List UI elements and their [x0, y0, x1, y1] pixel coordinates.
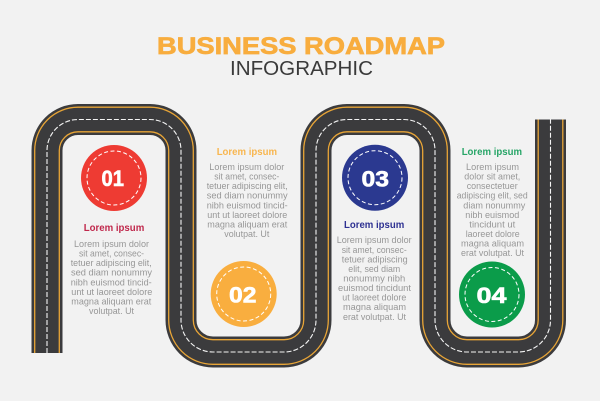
badge 04: [459, 262, 525, 328]
text block 01: nibh euismod tincid-: [71, 277, 152, 288]
text block 03: sit amet, consec-: [342, 245, 407, 256]
text block 04: magna aliquam: [461, 239, 524, 250]
text block 04: nibh euismod: [465, 210, 519, 221]
text block 03: Lorem ipsum dolor: [337, 235, 412, 246]
badge 01: [81, 145, 147, 211]
text block 02: volutpat. Ut: [224, 229, 270, 240]
text block 03: nonummy nibh: [343, 274, 405, 284]
text block 01: tetuer adipiscing elit,: [71, 258, 152, 269]
text block 03: magna aliquam: [343, 302, 406, 313]
badge 01: 01: [102, 166, 124, 191]
text block 04: [457, 162, 528, 259]
title: BUSINESS ROADMAP: [157, 33, 445, 60]
text block 02: unt ut laoreet dolore: [207, 210, 287, 221]
text block 04: adipiscing elit, sed: [457, 191, 528, 202]
text block 01: volutpat. Ut: [89, 306, 134, 317]
text block 03: [337, 235, 412, 323]
winding road: [35, 107, 563, 364]
text block 04: erat volutpat. Ut: [461, 248, 524, 259]
text block 02: tetuer adipiscing elit,: [207, 181, 288, 192]
badge 02: 02: [229, 282, 256, 308]
heading 03: Lorem ipsum: [344, 219, 404, 231]
text block 02: [207, 162, 288, 240]
text block 01: sed diam nonummy: [71, 268, 152, 279]
text block 01: [71, 239, 152, 317]
badge 02: [211, 261, 277, 327]
text block 04: consectetuer: [467, 181, 518, 192]
title: INFOGRAPHIC: [230, 58, 373, 80]
text block 04: laoreet dolore: [466, 229, 520, 240]
text block 04: diam nonummy: [463, 200, 526, 211]
text block 02: nibh euismod tincid-: [207, 200, 288, 211]
badge 03: 03: [362, 166, 389, 192]
heading 02: Lorem ipsum: [217, 146, 277, 158]
text block 02: Lorem ipsum dolor: [209, 162, 284, 173]
text block 01: Lorem ipsum dolor: [74, 239, 149, 250]
heading 04: Lorem ipsum: [462, 146, 522, 158]
heading 01: Lorem ipsum: [84, 222, 144, 234]
text block 01: magna aliquam erat: [71, 296, 152, 307]
text block 01: sit amet, consec-: [79, 249, 144, 260]
text block 03: euismod tincidunt: [338, 283, 411, 294]
badge 04: 04: [476, 283, 507, 308]
text block 02: sit amet, consec-: [214, 172, 279, 183]
badge 03: [342, 145, 408, 211]
text block 03: tetuer adipiscing: [342, 254, 408, 265]
text block 03: elit, sed diam: [348, 264, 400, 275]
text block 02: sed diam nonummy: [207, 191, 288, 202]
text block 02: magna aliquam erat: [207, 219, 288, 230]
text block 04: Lorem ipsum: [466, 162, 519, 173]
text block 03: erat volutpat. Ut: [343, 312, 406, 323]
text block 04: tincidunt ut: [469, 219, 516, 230]
text block 03: ut laoreet dolore: [342, 293, 406, 304]
title: [157, 33, 445, 80]
text block 01: unt ut laoreet dolore: [71, 287, 152, 298]
text block 04: dolor sit amet,: [464, 172, 520, 183]
